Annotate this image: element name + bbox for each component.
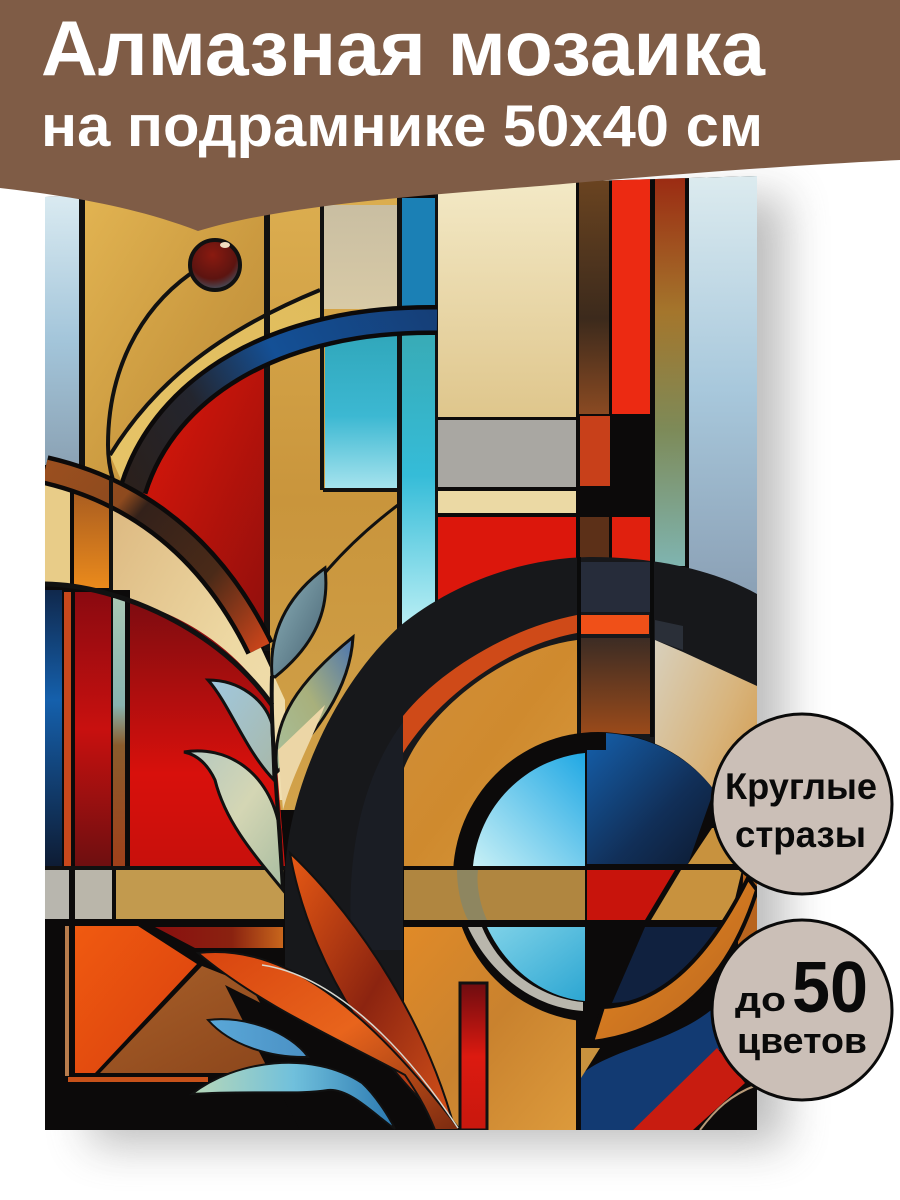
lower left panels [65,926,283,1082]
badge: round rhinestones: Круглые [725,766,877,807]
upper left panels [45,190,398,810]
subtitle: на подрамнике 50х40 см [41,94,763,159]
badge: up to 50 colours [712,920,892,1100]
orange band on arc [403,615,683,753]
canvas drop shadow [90,195,785,1145]
cream arc band [110,290,320,482]
badge: up to 50 colours: до [735,981,786,1019]
left strips and red dome [40,584,290,919]
blue circle [404,732,757,1042]
leaves: upper sprig [184,568,353,890]
painting: abstract stained-glass canvas [40,176,757,1130]
upper right cells [438,176,757,607]
circular orange interior [404,638,757,868]
upper middle cells [272,198,435,650]
badge: round rhinestones [712,714,892,894]
red wedge [142,368,264,623]
big black arc [285,557,757,1000]
badge: up to 50 colours: 50 [792,948,868,1028]
lower right corner shapes [581,1002,757,1130]
lower right orange field [403,866,757,1130]
badge: round rhinestones: стразы [735,814,866,855]
top brown ribbon banner [0,0,900,231]
left arch [45,470,285,800]
ball with thin stem [190,240,240,290]
leaves: lower foliage [192,853,460,1130]
badge: up to 50 colours: цветов [737,1020,867,1061]
title: Алмазная мозаика [41,4,766,92]
blue arc [133,320,437,490]
